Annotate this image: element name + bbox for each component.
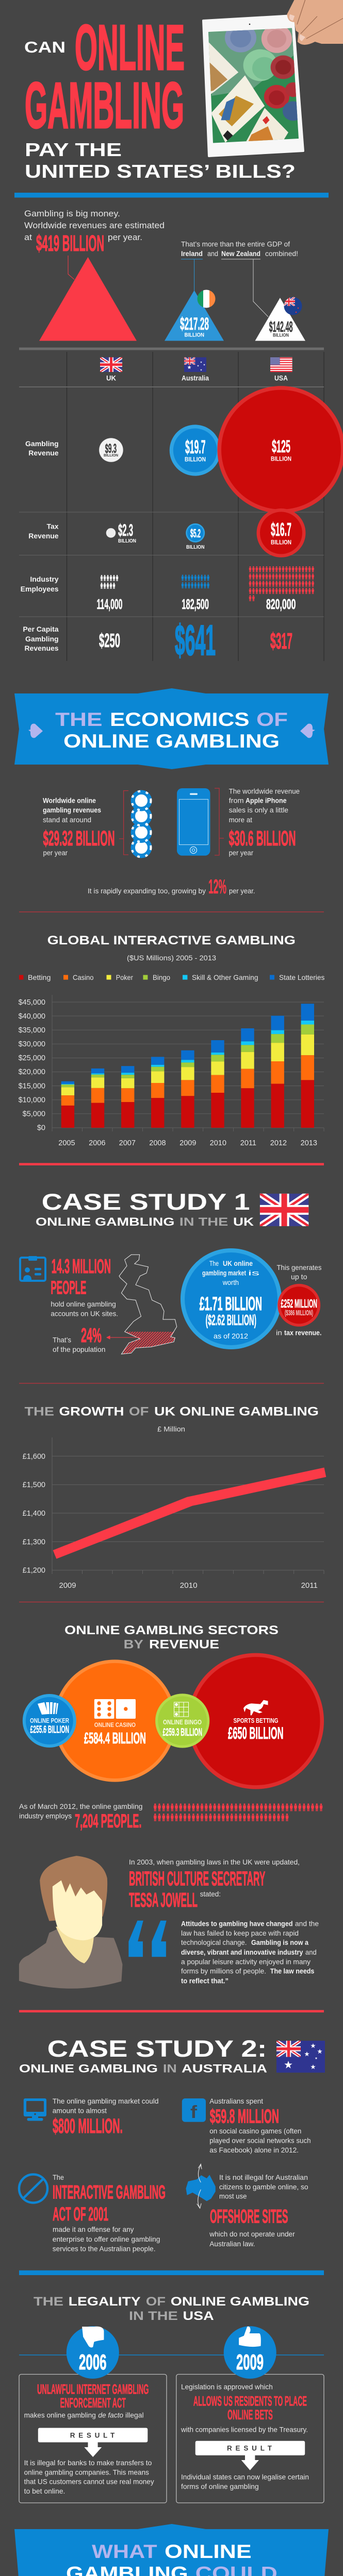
per capita figures bbox=[99, 616, 292, 664]
bubble: UK market worth: is bbox=[248, 1269, 259, 1277]
bubble: online poker: £255.6 BILLION bbox=[30, 1724, 69, 1736]
employee pictograms and counts: 182,500 bbox=[182, 596, 209, 612]
Australia: market size: The online gambling market could bbox=[53, 2097, 159, 2105]
panel: 2006: de facto bbox=[98, 2411, 123, 2419]
bubble: UK market worth: The bbox=[209, 1259, 219, 1267]
bubble: UK market worth: as of 2012 bbox=[214, 1332, 248, 1340]
row labels: Gambling bbox=[25, 635, 59, 643]
quote text: law has failed to keep pace with rapid bbox=[181, 1929, 299, 1937]
panel: 2006: that US customers cannot use real money bbox=[24, 2478, 154, 2486]
UK accounts block: 24% bbox=[81, 1325, 102, 1347]
heading: case study 1: UK bbox=[233, 1215, 254, 1228]
quote text bbox=[181, 1920, 319, 1985]
tax revenue bubbles: $2.3 bbox=[118, 521, 133, 539]
tax revenue bubbles: $16.7 bbox=[271, 519, 291, 540]
Australia: offshore sites: which do not operate under bbox=[209, 2230, 295, 2238]
bubble: online bingo bbox=[155, 1693, 209, 1748]
Australia: offshore sites: It is not illegal for Australian bbox=[219, 2173, 308, 2181]
bubble: online casino: £584.4 BILLION bbox=[84, 1729, 146, 1747]
banner: what online gambling could do: WHAT bbox=[92, 2540, 157, 2562]
Australia: offshore sites bbox=[186, 2164, 308, 2248]
bar 2006 bbox=[91, 1069, 104, 1128]
heading: case study 1: ONLINE GAMBLING bbox=[36, 1215, 174, 1228]
hand holding tablet bbox=[287, 0, 343, 45]
growth statement: per year. bbox=[229, 887, 255, 895]
tablet with cards and chips photo bbox=[203, 15, 305, 158]
heading: legality in the USA: USA bbox=[183, 2309, 214, 2323]
stacked bar chart: $30,000 bbox=[19, 1040, 45, 1048]
employment statement and pictogram: 7,204 PEOPLE. bbox=[75, 1810, 141, 1832]
icon: spade right bbox=[300, 724, 315, 738]
title block: UNITED STATES’ BILLS? bbox=[25, 161, 296, 182]
online gambling revenue block: Worldwide online bbox=[43, 796, 96, 805]
panel: 2009: 2009 bbox=[236, 2350, 264, 2374]
online gambling revenue block: per year bbox=[43, 849, 68, 857]
gambling revenue bubbles: $19.7 bbox=[185, 436, 206, 457]
iPhone revenue block: from bbox=[229, 796, 244, 805]
online gambling revenue block: $29.32 BILLION bbox=[43, 826, 115, 850]
heading: online gambling sectors: ONLINE GAMBLING SECTORS bbox=[64, 1623, 279, 1637]
chart legend: Casino bbox=[73, 973, 94, 981]
triangle chart: gambling vs GDP: BILLION bbox=[273, 333, 289, 338]
icon: quotation marks bbox=[128, 1921, 167, 1957]
line chart: UK growth: 2010 bbox=[180, 1582, 198, 1590]
stacked bar chart: 2013 bbox=[301, 1139, 317, 1147]
title block: PAY THE bbox=[25, 139, 122, 160]
quote text: forms by millions of people. bbox=[181, 1967, 266, 1975]
bubble: UK market worth: gambling market bbox=[202, 1269, 246, 1277]
gambling revenue bubbles: BILLION bbox=[271, 456, 291, 462]
UK accounts block: PEOPLE bbox=[51, 1277, 86, 1298]
bubble: tax revenue: ($386 MILLION) bbox=[285, 1309, 313, 1317]
column headings: UK bbox=[106, 374, 116, 382]
Tessa Jowell quote heading: In 2003, when gambling laws in the UK were updated, bbox=[129, 1858, 300, 1866]
stacked bar chart bbox=[19, 995, 324, 1147]
Australia: Interactive Gambling Act: ACT OF 2001 bbox=[53, 2204, 108, 2225]
line chart: UK growth: 2009 bbox=[59, 1582, 76, 1590]
bar 2005 bbox=[61, 1081, 74, 1128]
bubble: online poker bbox=[23, 1694, 76, 1748]
growth statement: It is rapidly expanding too, growing by bbox=[88, 887, 206, 895]
comparison table bbox=[19, 347, 343, 664]
chart legend: Skill & Other Gaming bbox=[192, 973, 258, 981]
UK accounts block: That’s bbox=[53, 1336, 71, 1344]
stacked bar chart: 2010 bbox=[210, 1139, 226, 1147]
bar 2013 bbox=[301, 1004, 314, 1128]
UK accounts block: hold online gambling bbox=[51, 1300, 116, 1308]
illustration: Tessa Jowell bbox=[19, 1856, 122, 1989]
heading: legality in the USA: LEGALITY bbox=[69, 2295, 141, 2309]
gambling revenue bubbles bbox=[99, 386, 343, 513]
arrow: result bbox=[241, 2455, 259, 2470]
Australia: Interactive Gambling Act: enterprise to offer online gambling bbox=[53, 2235, 160, 2243]
heading: global interactive gambling: GLOBAL INTERACTIVE GAMBLING bbox=[47, 934, 296, 947]
heading: case study 1: CASE STUDY 1 bbox=[42, 1190, 250, 1215]
intro text: at bbox=[24, 232, 32, 242]
online gambling revenue block: stand at around bbox=[43, 816, 91, 824]
column headings bbox=[106, 374, 288, 382]
row labels: Tax bbox=[47, 522, 59, 531]
icon: prohibition sign bbox=[19, 2174, 47, 2203]
stacked bar chart: 2009 bbox=[179, 1139, 196, 1147]
stacked bar chart: $10,000 bbox=[19, 1096, 45, 1105]
bubble: tax revenue: up to bbox=[291, 1273, 307, 1281]
Australia: social casino spend: played over social networks such bbox=[209, 2137, 311, 2145]
panel: 2009: Individual states can now legalise certain bbox=[181, 2473, 309, 2481]
Australia: social casino spend: on social casino games (often bbox=[209, 2127, 301, 2135]
intro text: Worldwide revenues are estimated bbox=[24, 221, 165, 230]
GDP comparison text: Ireland bbox=[181, 249, 203, 258]
quote text: diverse, vibrant and innovative industry bbox=[181, 1948, 303, 1956]
heading: legality in the USA: IN THE bbox=[129, 2309, 178, 2323]
flag: Australia bbox=[276, 2041, 325, 2073]
text: INTERACTIVE GAMBLING bbox=[53, 2182, 166, 2203]
flag: Australia bbox=[184, 358, 206, 372]
per capita figures: $250 bbox=[99, 630, 120, 652]
quote text: and bbox=[305, 1948, 317, 1956]
panel: 2009: ONLINE BETS bbox=[227, 2407, 273, 2422]
bar 2008 bbox=[151, 1057, 164, 1128]
column headings: Australia bbox=[182, 374, 209, 382]
quote text: Attitudes to gambling have changed bbox=[181, 1920, 293, 1928]
bar 2007 bbox=[121, 1066, 134, 1128]
icon: ID badge bbox=[20, 1256, 45, 1281]
UK accounts block bbox=[20, 1256, 118, 1353]
bubble: tax revenue bbox=[276, 1263, 321, 1336]
GDP comparison text: combined! bbox=[265, 249, 298, 258]
gambling revenue bubbles: $125 bbox=[272, 437, 290, 456]
Australia: social casino spend bbox=[182, 2097, 311, 2154]
Tessa Jowell quote heading: TESSA JOWELL bbox=[129, 1889, 198, 1911]
bar 2009 bbox=[181, 1050, 194, 1128]
bubble: UK market worth: worth bbox=[222, 1278, 239, 1286]
GDP comparison text: New Zealand bbox=[221, 249, 260, 258]
stacked bar chart: $15,000 bbox=[19, 1082, 45, 1090]
comparison table: $317 bbox=[270, 629, 292, 654]
line chart: UK growth: £1,600 bbox=[23, 1453, 45, 1461]
bar 2012 bbox=[271, 1016, 284, 1128]
triangle chart: gambling vs GDP: $217.28 bbox=[180, 314, 209, 334]
heading: growth of UK online gambling: GROWTH bbox=[59, 1405, 124, 1419]
arrow: 24% to south of England bbox=[107, 1336, 140, 1339]
GDP comparison text bbox=[181, 240, 298, 258]
line chart: UK growth: 2011 bbox=[301, 1582, 318, 1590]
flag: UK bbox=[260, 1194, 308, 1226]
stacked bar chart: $40,000 bbox=[19, 1012, 45, 1021]
bar 2010 bbox=[211, 1040, 224, 1128]
triangle chart: gambling vs GDP: BILLION bbox=[185, 332, 204, 338]
Tessa Jowell quote heading bbox=[129, 1858, 300, 1911]
row labels: Industry bbox=[30, 575, 59, 583]
heading: legality in the USA: THE bbox=[34, 2295, 63, 2309]
employment statement and pictogram: As of March 2012, the online gambling bbox=[19, 1802, 142, 1810]
Australia: Interactive Gambling Act bbox=[19, 2173, 166, 2253]
growth statement bbox=[88, 876, 255, 898]
intro text: Gambling is big money. bbox=[24, 209, 120, 218]
bubble: UK market worth: ($2.62 BILLION) bbox=[206, 1312, 256, 1329]
banner: the economics of online gambling: OF bbox=[256, 708, 288, 730]
panel: 2009 bbox=[176, 2326, 324, 2503]
per capita figures: $641 bbox=[175, 616, 216, 664]
heading: global interactive gambling bbox=[47, 934, 296, 962]
row labels: Gambling bbox=[25, 439, 59, 448]
employee pictograms and counts bbox=[97, 566, 315, 612]
stacked bar chart: 2012 bbox=[270, 1139, 287, 1147]
quote text: Gambling is now a bbox=[251, 1938, 308, 1946]
intro text: $419 BILLION bbox=[36, 231, 104, 256]
bubble: sports betting: SPORTS BETTING bbox=[233, 1717, 279, 1724]
UK accounts block: accounts on UK sites. bbox=[51, 1310, 118, 1318]
bubble: UK market worth bbox=[181, 1248, 282, 1349]
panel: 2006: UNLAWFUL INTERNET GAMBLING bbox=[37, 2381, 149, 2397]
bubble: tax revenue: This generates bbox=[276, 1263, 321, 1272]
heading: global interactive gambling: ($US Millions) 2005 - 2013 bbox=[127, 954, 216, 962]
heading: case study 2: IN bbox=[163, 2062, 177, 2075]
stacked bar chart: 2011 bbox=[240, 1139, 256, 1147]
title block: ONLINE bbox=[75, 12, 185, 83]
panel: 2006: makes online gambling bbox=[24, 2411, 96, 2419]
stacked bar chart: $5,000 bbox=[23, 1110, 45, 1118]
quote text: a popular leisure activity enjoyed in many bbox=[181, 1958, 311, 1966]
heading: growth of UK online gambling: £ Million bbox=[157, 1425, 185, 1433]
gambling revenue bubbles: $9.3 bbox=[105, 442, 117, 456]
heading: online gambling sectors: BY bbox=[124, 1638, 143, 1652]
chart legend bbox=[19, 973, 324, 981]
iPhone revenue block: per year bbox=[229, 849, 253, 857]
banner: what online gambling could do bbox=[14, 2524, 329, 2576]
row labels: Per Capita bbox=[23, 625, 59, 633]
heading: legality in the USA: ONLINE GAMBLING bbox=[171, 2295, 309, 2309]
icon: spade left bbox=[28, 724, 43, 738]
heading: growth of UK online gambling: UK ONLINE GAMBLING bbox=[154, 1405, 319, 1419]
stacked bar chart: $0 bbox=[37, 1124, 45, 1132]
stacked bar chart: $25,000 bbox=[19, 1054, 45, 1062]
heading: growth of UK online gambling bbox=[25, 1405, 319, 1433]
stacked bar chart: 2007 bbox=[119, 1139, 136, 1147]
chart legend: State Lotteries bbox=[279, 973, 324, 981]
column headings: USA bbox=[274, 374, 288, 382]
banner: the economics of online gambling bbox=[14, 688, 329, 769]
tax revenue bubbles: $5.2 bbox=[190, 527, 201, 540]
title block: CAN bbox=[24, 38, 66, 56]
bubble: UK market worth: £1.71 BILLION bbox=[200, 1293, 262, 1314]
quote text: technological change. bbox=[181, 1938, 247, 1946]
Australia: offshore sites: Australian law. bbox=[209, 2240, 255, 2248]
growth statement: 12% bbox=[208, 876, 226, 898]
panel: 2009: Legislation is approved which bbox=[181, 2382, 273, 2391]
stacked bar chart: $45,000 bbox=[19, 998, 45, 1007]
online gambling revenue block: gambling revenues bbox=[43, 806, 101, 814]
heading: legality in the USA: OF bbox=[146, 2295, 166, 2309]
UK accounts block: 14.3 MILLION bbox=[52, 1256, 111, 1278]
chart legend: Bingo bbox=[153, 973, 170, 981]
bubble: sports betting: £650 BILLION bbox=[228, 1724, 284, 1742]
intro text: per year. bbox=[108, 232, 142, 242]
chart legend: Poker bbox=[116, 973, 133, 981]
UK accounts block: of the population bbox=[53, 1345, 105, 1353]
arrow: result bbox=[84, 2442, 102, 2457]
icon: thumbs up bbox=[239, 2327, 261, 2347]
banner: the economics of online gambling: ONLINE GAMBLING bbox=[63, 730, 280, 752]
intro text bbox=[24, 209, 165, 256]
heading: online gambling sectors: REVENUE bbox=[149, 1638, 219, 1652]
GDP comparison text: That’s more than the entire GDP of bbox=[181, 240, 290, 248]
timeline line bbox=[19, 2354, 324, 2355]
Australia: market size: $800 MILLION. bbox=[53, 2115, 123, 2138]
panel: 2006: ENFORCEMENT ACT bbox=[60, 2395, 126, 2411]
line chart: UK growth: £1,500 bbox=[23, 1481, 45, 1489]
bubble: UK market worth: UK online bbox=[223, 1259, 253, 1267]
gambling revenue bubbles: BILLION bbox=[185, 457, 206, 463]
panel: 2006 bbox=[19, 2326, 167, 2503]
heading: case study 2: ONLINE GAMBLING bbox=[19, 2062, 158, 2075]
Tessa Jowell quote heading: stated: bbox=[200, 1890, 221, 1898]
stacked bar chart: $35,000 bbox=[19, 1026, 45, 1035]
iPhone revenue block: more at bbox=[229, 816, 252, 824]
icon: Facebook bbox=[182, 2098, 206, 2122]
panel: 2006: illegal bbox=[125, 2411, 144, 2419]
panel: 2006: It is illegal for banks to make transfers to bbox=[24, 2459, 152, 2467]
Australia: social casino spend: $59.8 MILLION bbox=[210, 2106, 279, 2128]
iPhone revenue block: Apple iPhone bbox=[246, 796, 287, 805]
Australia: offshore sites: most use bbox=[219, 2192, 247, 2200]
flag: UK bbox=[100, 358, 122, 372]
Australia: Interactive Gambling Act: services to the Australian people. bbox=[53, 2245, 156, 2253]
panel: 2006: online gambling companies. This means bbox=[24, 2468, 149, 2476]
bubble: online bingo: £259.3 BILLION bbox=[163, 1726, 202, 1738]
tax revenue bubbles bbox=[106, 509, 305, 557]
row labels: Revenue bbox=[28, 532, 59, 540]
Australia: social casino spend: Australians spent bbox=[209, 2097, 263, 2105]
chart legend: Betting bbox=[28, 973, 51, 981]
heading: case study 2: AUSTRALIA bbox=[182, 2062, 267, 2075]
iPhone revenue block: sales is only a little bbox=[229, 806, 288, 814]
quote text: to reflect that.” bbox=[181, 1976, 228, 1985]
panel: 2006: 2006 bbox=[79, 2350, 106, 2374]
icon: Australia map with arrows bbox=[186, 2164, 216, 2208]
Australia: market size bbox=[24, 2097, 159, 2138]
heading: online gambling sectors bbox=[64, 1623, 279, 1652]
panel: 2006: RESULT bbox=[70, 2431, 115, 2439]
heading: case study 2: CASE STUDY 2: bbox=[47, 2036, 267, 2062]
heading: case study 2 bbox=[19, 2036, 325, 2075]
Australia: market size: amount to almost bbox=[53, 2107, 107, 2115]
triangle chart: gambling vs GDP: $142.48 bbox=[269, 319, 293, 335]
tax revenue bubbles: BILLION bbox=[271, 540, 291, 546]
bubble: online casino: ONLINE CASINO bbox=[94, 1722, 136, 1728]
title block bbox=[24, 12, 296, 182]
Australia: social casino spend: as Facebook) alone in 2012. bbox=[209, 2146, 299, 2154]
employee pictograms and counts: 820,000 bbox=[266, 596, 296, 612]
bubble: online bingo: ONLINE BINGO bbox=[163, 1719, 202, 1726]
icon: stack of chips bbox=[131, 790, 152, 858]
panel: 2006: to bet online. bbox=[24, 2487, 65, 2495]
stacked bar chart: 2005 bbox=[58, 1139, 75, 1147]
panel: 2009: with companies licensed by the Treasury. bbox=[181, 2425, 308, 2433]
divider bar bbox=[14, 193, 329, 198]
row labels bbox=[21, 439, 59, 652]
bar 2011 bbox=[241, 1028, 254, 1128]
bubble: online poker: ONLINE POKER bbox=[30, 1717, 69, 1724]
line chart: UK growth: £1,400 bbox=[23, 1510, 45, 1518]
heading: case study 1 bbox=[36, 1190, 308, 1228]
Australia: Interactive Gambling Act: The bbox=[53, 2173, 64, 2181]
heading: case study 1: IN THE bbox=[179, 1215, 228, 1228]
triangle chart: gambling vs GDP bbox=[39, 256, 305, 341]
banner: what online gambling could do: ONLINE bbox=[165, 2540, 252, 2562]
iPhone revenue block bbox=[177, 787, 300, 857]
GDP comparison text: and bbox=[207, 249, 218, 258]
bubble: online casino bbox=[54, 1659, 176, 1782]
line chart: UK growth: £1,300 bbox=[23, 1538, 45, 1547]
stacked bar chart: 2008 bbox=[149, 1139, 166, 1147]
line chart: UK growth bbox=[23, 1437, 326, 1590]
employment statement and pictogram bbox=[19, 1802, 323, 1832]
tax revenue bubbles: BILLION bbox=[118, 538, 136, 544]
stacked bar chart: $20,000 bbox=[19, 1068, 45, 1076]
stacked bar chart: 2006 bbox=[89, 1139, 105, 1147]
row labels: Revenues bbox=[24, 644, 59, 652]
icon: Facebook: f bbox=[190, 2103, 198, 2122]
banner: the economics of online gambling: THE bbox=[55, 708, 102, 730]
employee pictograms and counts: 114,000 bbox=[97, 596, 123, 612]
map: Great Britain with hatched south bbox=[107, 1255, 177, 1354]
iPhone revenue block: The worldwide revenue bbox=[229, 787, 300, 795]
quote text: and the bbox=[295, 1920, 319, 1928]
online gambling revenue block bbox=[43, 790, 152, 858]
Australia: offshore sites: citizens to gamble online, so bbox=[219, 2182, 308, 2191]
icon: iPhone bbox=[177, 788, 210, 856]
heading: growth of UK online gambling: THE bbox=[25, 1405, 54, 1419]
quote text: The law needs bbox=[270, 1967, 315, 1975]
row labels: Employees bbox=[21, 585, 59, 593]
heading: growth of UK online gambling: OF bbox=[129, 1405, 149, 1419]
bubble chart: sectors by revenue bbox=[23, 1653, 324, 1789]
bubble: sports betting bbox=[188, 1653, 324, 1789]
icon: thumbs down bbox=[82, 2327, 104, 2348]
line chart: UK growth: £1,200 bbox=[23, 1566, 45, 1574]
heading: legality in the USA bbox=[34, 2295, 309, 2323]
employment statement and pictogram: industry employs bbox=[19, 1811, 72, 1820]
Australia: Interactive Gambling Act: made it an offense for any bbox=[53, 2225, 134, 2233]
tax revenue bubbles: BILLION bbox=[186, 545, 204, 550]
panel: 2009: forms of online gambling bbox=[181, 2482, 259, 2490]
row labels: Revenue bbox=[28, 449, 59, 457]
bubble: tax revenue: in bbox=[276, 1328, 282, 1336]
icon: monitor bbox=[24, 2098, 46, 2121]
gambling revenue bubbles: BILLION bbox=[104, 453, 118, 457]
panel: 2009: RESULT bbox=[227, 2445, 272, 2452]
bubble: tax revenue: tax revenue. bbox=[284, 1328, 321, 1336]
banner: the economics of online gambling: ECONOMICS bbox=[110, 708, 250, 730]
flag: USA bbox=[270, 358, 292, 372]
